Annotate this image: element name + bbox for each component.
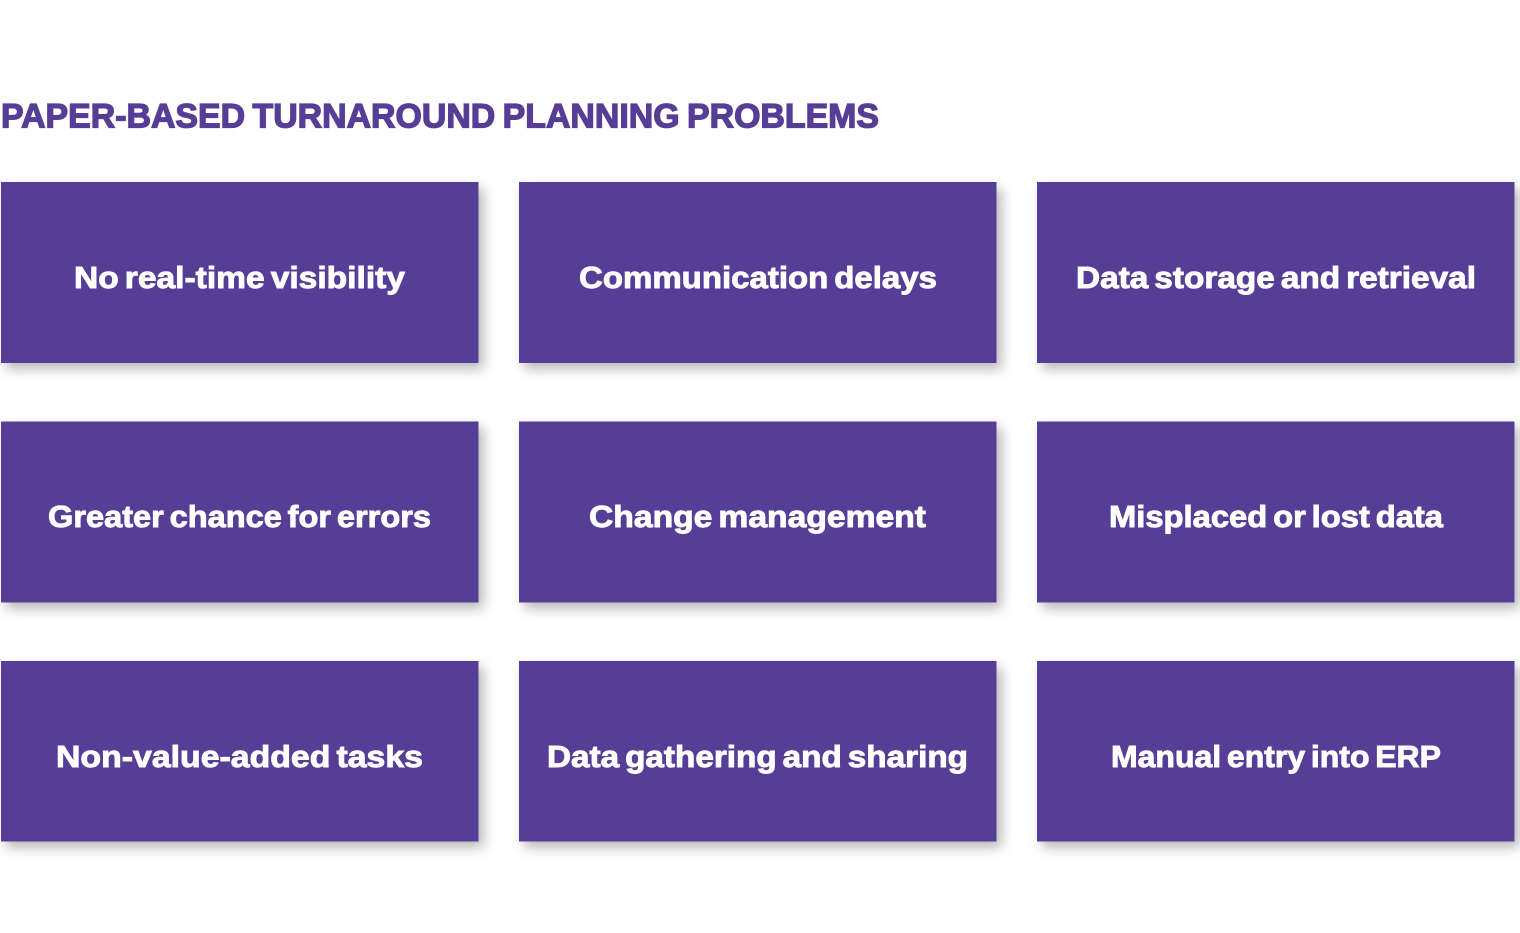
panel: communication delays — [519, 182, 996, 363]
panel: non-value-added tasks — [1, 661, 478, 842]
title: PAPER-BASED TURNAROUND PLANNING PROBLEMS — [1, 98, 879, 136]
panel: data gathering and sharing — [519, 661, 996, 842]
panel: non-value-added tasks: Non-value-added tasks — [56, 740, 423, 774]
panel: no real-time visibility — [1, 182, 478, 363]
panel: manual entry into ERP — [1037, 661, 1514, 842]
panel: change management — [519, 422, 996, 602]
panel: communication delays: Communication delays — [579, 261, 937, 295]
panel: data gathering and sharing: Data gathering and sharing — [547, 740, 968, 774]
panel: greater chance for errors — [1, 422, 478, 602]
panel: misplaced or lost data — [1037, 422, 1514, 602]
panel: data storage and retrieval: Data storage and retrieval — [1076, 261, 1476, 295]
panel: data storage and retrieval — [1037, 182, 1514, 363]
panel: change management: Change management — [589, 500, 926, 534]
panel: manual entry into ERP: Manual entry into ERP — [1111, 740, 1441, 774]
panel: no real-time visibility: No real-time visibility — [74, 261, 405, 295]
panel: misplaced or lost data: Misplaced or lost data — [1109, 500, 1444, 534]
panel: greater chance for errors: Greater chance for errors — [48, 500, 431, 534]
